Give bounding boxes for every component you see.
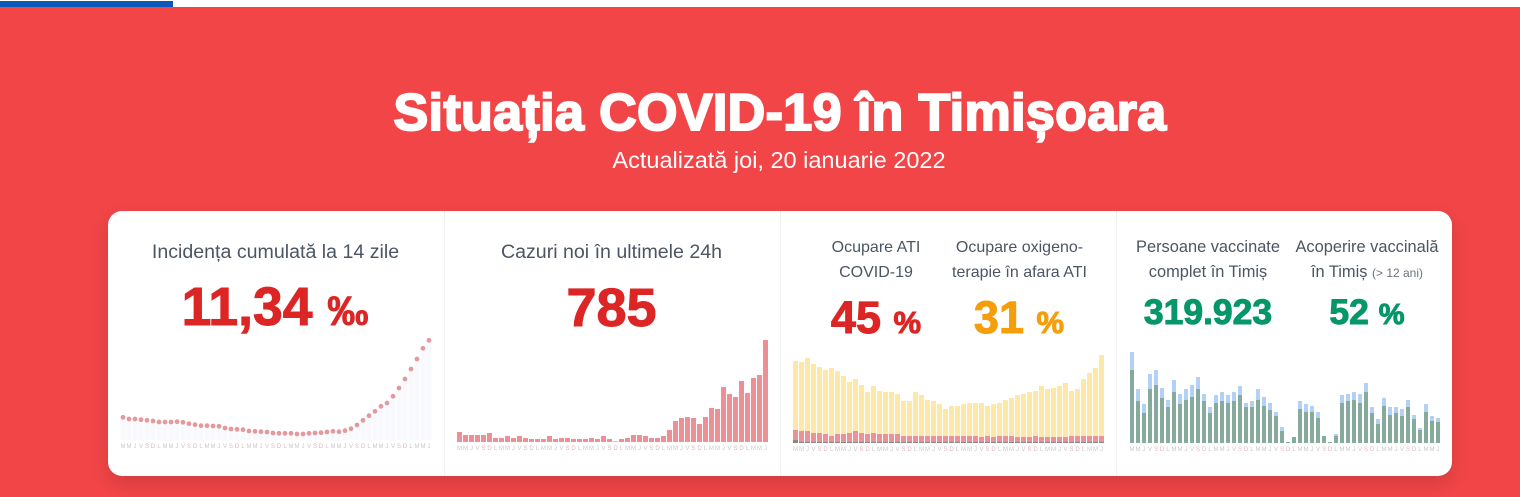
chart: incidence dot plot: MMJVLMMJVLMMJVLMMJVLMMJVLMMJVLMMJVLMMJ	[120, 444, 430, 450]
chart: vaccination stacked bars	[1130, 352, 1440, 453]
chart: new cases bars: SDSDSDSDSDSDSD	[481, 446, 744, 452]
subtitle: Actualizată joi, 20 ianuarie 2022	[612, 147, 946, 173]
heading: ATI occupancy: COVID-19	[839, 264, 913, 281]
chart: hospital occupancy stacked bars: MMJVLMMJVLMMJVLMMJVLMMJVLMMJVLMMJVLMMJ	[793, 447, 1103, 453]
top progress bar	[0, 0, 1520, 7]
value: incidence: 11,34 ‰	[182, 278, 368, 337]
title: Situația COVID-19 în Timișoara	[393, 84, 1167, 142]
heading: fully vaccinated: complet în Timiș	[1149, 263, 1267, 281]
panel: vaccination	[1136, 238, 1439, 332]
heading: new cases: Cazuri noi în ultimele 24h	[501, 241, 722, 263]
heading: oxygen therapy occupancy: terapie în afara ATI	[952, 264, 1087, 281]
heading: fully vaccinated: Persoane vaccinate	[1136, 238, 1280, 256]
chart: incidence dot plot: SDSDSDSDSDSDSD	[145, 444, 408, 450]
panel: new cases	[501, 241, 722, 338]
heading: vaccination coverage: în Timiș (> 12 ani)	[1311, 263, 1423, 281]
chart: new cases bars: MMJVLMMJVLMMJVLMMJVLMMJVLMMJVLMMJVLMMJ	[457, 446, 767, 452]
chart: incidence dot plot	[120, 340, 430, 450]
heading: vaccination coverage: Acoperire vaccinală	[1295, 238, 1439, 256]
panel: incidence	[152, 241, 399, 337]
value: new cases: 785	[566, 278, 657, 338]
heading: ATI occupancy: Ocupare ATI	[832, 239, 920, 256]
heading: oxygen therapy occupancy	[952, 239, 1087, 281]
card container	[108, 211, 1452, 476]
value: fully vaccinated: 319.923	[1144, 292, 1272, 332]
chart: new cases bars	[457, 340, 767, 452]
heading: ATI occupancy	[832, 239, 920, 281]
panel: hospital occupancy	[831, 239, 1087, 343]
heading: oxygen therapy occupancy: Ocupare oxigeno-	[956, 239, 1083, 256]
chart: vaccination stacked bars: MMJVLMMJVLMMJVLMMJVLMMJVLMMJVLMMJVLMMJ	[1130, 447, 1440, 453]
value: vaccination coverage: 52 %	[1329, 292, 1405, 332]
value: oxygen therapy occupancy: 31 %	[974, 292, 1064, 343]
value: ATI occupancy: 45 %	[831, 292, 921, 343]
heading: vaccination coverage	[1295, 238, 1439, 281]
chart: hospital occupancy stacked bars	[793, 355, 1103, 453]
heading: fully vaccinated	[1136, 238, 1280, 281]
chart: hospital occupancy stacked bars: SDSDSDSDSDSDSD	[817, 447, 1080, 453]
chart: vaccination stacked bars: SDSDSDSDSDSDSD	[1154, 447, 1417, 453]
heading: incidence: Incidența cumulată la 14 zile	[152, 241, 399, 263]
